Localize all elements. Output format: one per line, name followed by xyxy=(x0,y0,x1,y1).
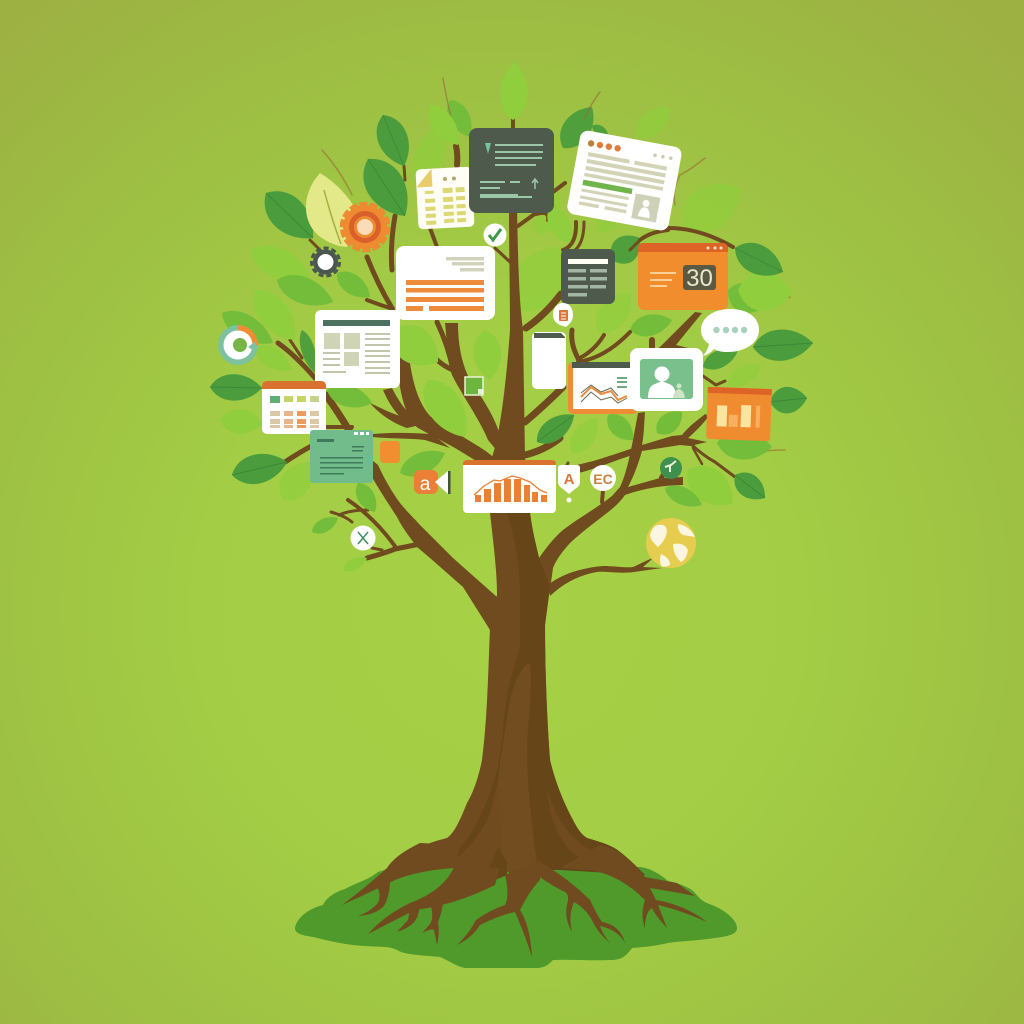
root centre xyxy=(457,860,540,957)
root far left xyxy=(342,843,460,905)
second left branch system xyxy=(396,348,498,462)
card: orange calendar with number: 30 xyxy=(686,265,713,292)
icon: letter tile with pointer: a xyxy=(420,474,431,495)
central lighter trunk panel xyxy=(498,663,538,870)
card: bar and trend chart xyxy=(463,460,556,513)
card: orange lines document xyxy=(396,246,495,320)
left branches xyxy=(278,343,328,385)
tree trunk xyxy=(390,205,645,890)
card: dark text panel xyxy=(469,128,554,213)
lower right limb xyxy=(548,558,662,596)
upper-left branches xyxy=(437,322,453,370)
card: dark list xyxy=(561,249,615,304)
icon: donut chart xyxy=(218,325,258,365)
icon: letter badge: EC xyxy=(593,471,613,487)
icon: letter badge xyxy=(590,465,616,491)
card: tilted browser document xyxy=(566,129,683,232)
roots xyxy=(342,843,707,957)
icon: check badge xyxy=(484,224,506,246)
card: spreadsheet note xyxy=(415,167,475,229)
branches xyxy=(278,118,735,630)
trunk shading xyxy=(498,513,645,875)
icon: dark gear xyxy=(312,248,340,276)
icon: close badge xyxy=(350,526,376,550)
icon: orange square xyxy=(380,441,400,463)
icon: map pin: A xyxy=(564,471,575,488)
lower left limb xyxy=(372,460,497,630)
icon: map pin xyxy=(558,465,580,502)
speech bubble xyxy=(701,309,759,356)
card: orange calendar with number xyxy=(638,243,728,310)
thin twigs at the crown edge xyxy=(322,78,790,452)
card: user profile xyxy=(630,348,703,411)
card: left document with image grid xyxy=(315,310,400,388)
root centre right xyxy=(530,860,625,943)
card: line chart xyxy=(568,362,638,414)
root centre left xyxy=(368,865,500,934)
root far right xyxy=(560,845,707,928)
icon: small badge xyxy=(553,303,573,327)
right main limb and side shoots xyxy=(539,412,709,590)
icon: letter tile with pointer xyxy=(414,470,450,495)
dark green leaves xyxy=(210,109,814,507)
card: green form xyxy=(310,430,373,483)
leaf midribs xyxy=(210,115,813,498)
card: orange bar chart xyxy=(706,387,772,441)
icon: tall note xyxy=(532,332,566,389)
main stem top xyxy=(511,118,515,128)
foliage over branches xyxy=(210,62,814,575)
card: calendar table xyxy=(262,381,326,434)
icon: orange gear xyxy=(342,204,388,250)
icon: pale yellow leaf xyxy=(306,173,356,247)
icon: image tile xyxy=(465,377,483,395)
icon: small green badge xyxy=(660,457,682,479)
right side branches xyxy=(525,387,563,422)
foliage behind branches xyxy=(216,95,771,508)
ground mound xyxy=(295,867,737,968)
icon: globe xyxy=(646,518,696,568)
